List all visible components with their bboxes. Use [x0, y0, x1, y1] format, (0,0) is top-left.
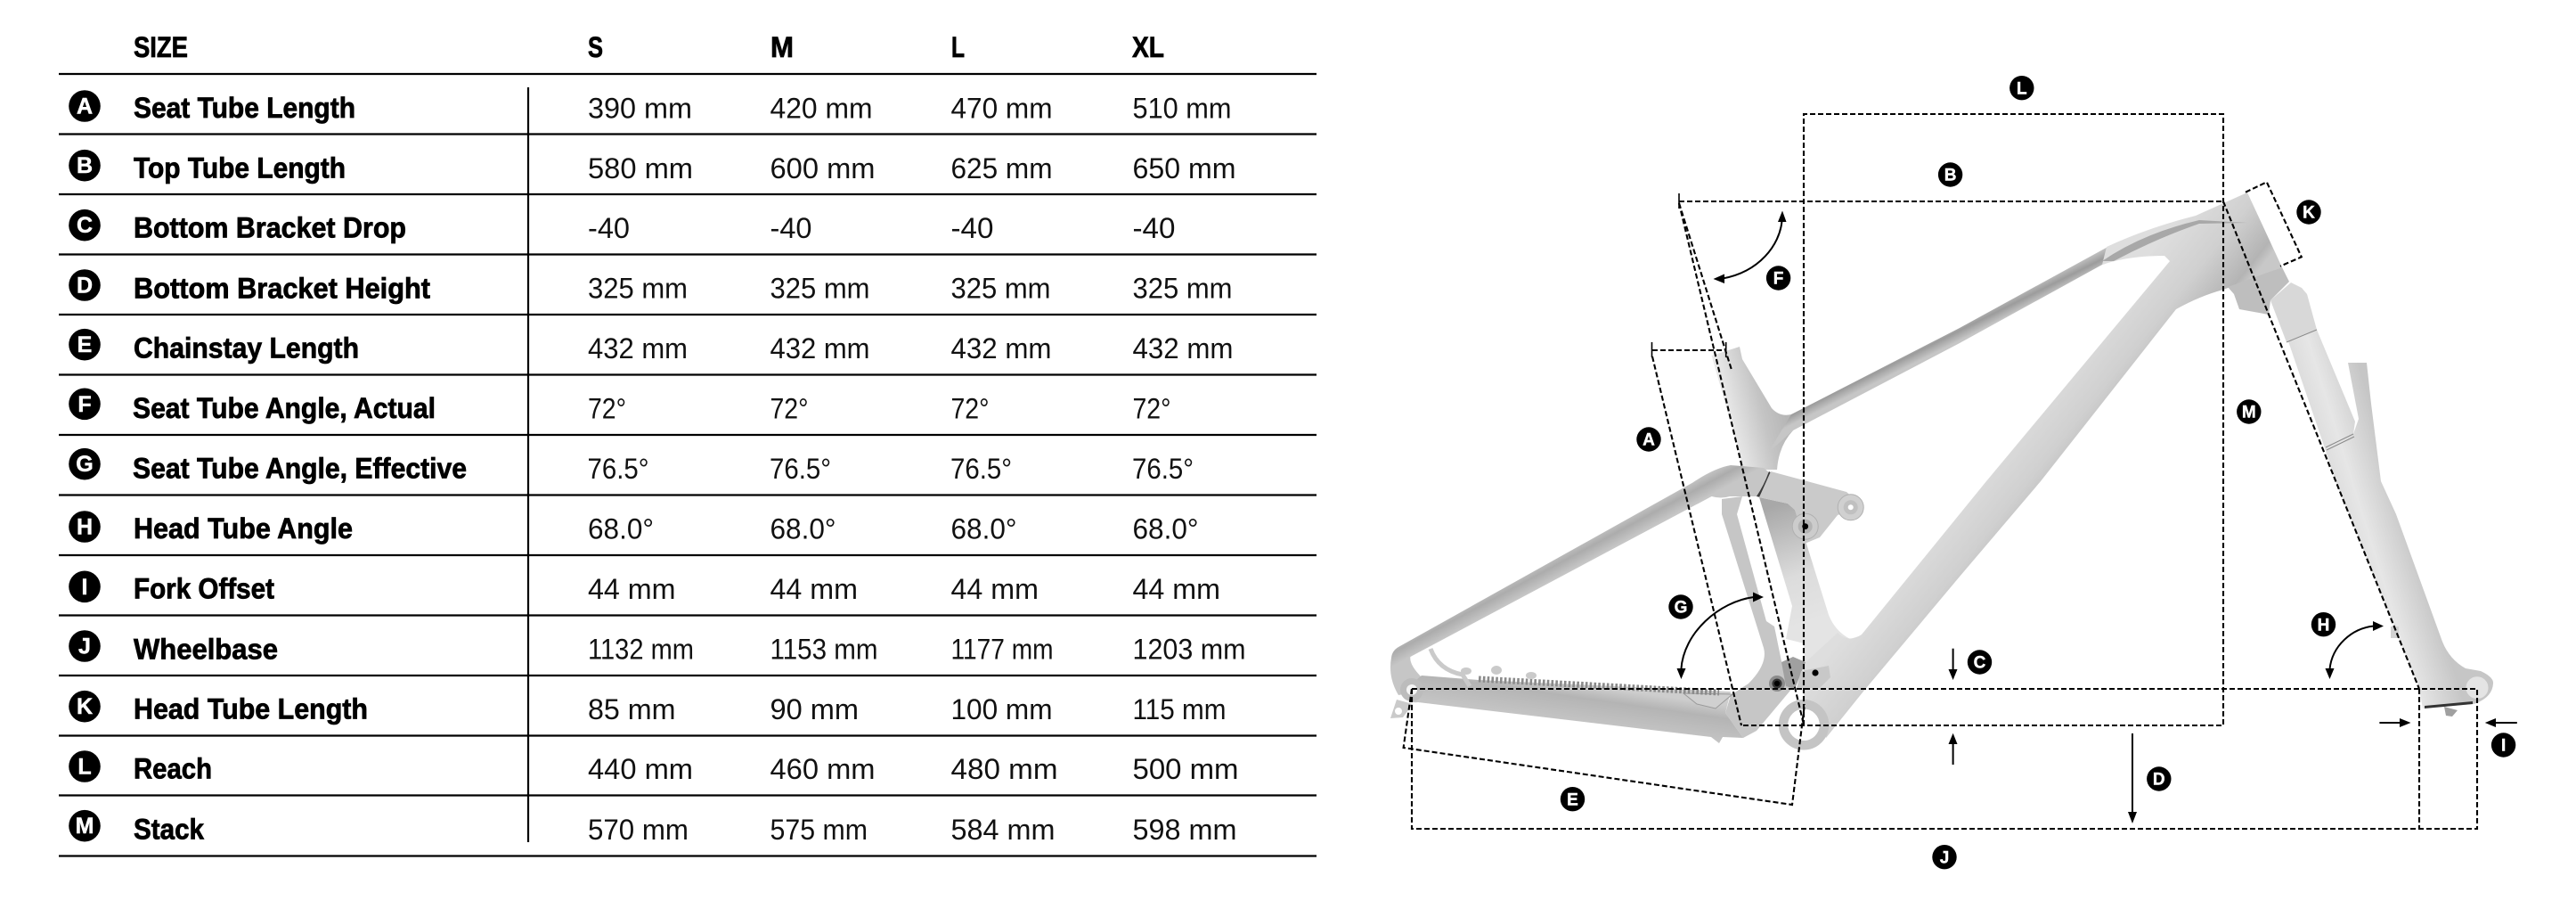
seat tube effective line — [1679, 203, 1804, 725]
chain guard teeth — [1479, 679, 1719, 692]
fork offset line — [2418, 689, 2420, 829]
row J: Wheelbase — [134, 633, 278, 665]
bike frame and fork illustration — [1390, 192, 2493, 745]
row I: I — [82, 575, 87, 600]
badge I: I — [2501, 737, 2506, 756]
badge L: L — [2017, 79, 2027, 98]
row G: Seat Tube Angle, Effective — [133, 452, 467, 484]
seat tube and shock — [1759, 497, 1871, 691]
badge I — [2491, 733, 2515, 758]
fork dropout — [2425, 676, 2489, 717]
top tube line B — [1679, 201, 2223, 202]
row E: Chainstay Length — [134, 332, 359, 364]
ticks — [1651, 193, 1726, 357]
badge H: H — [2318, 616, 2329, 635]
badge C — [1968, 650, 1992, 675]
row H: 68.0° — [588, 513, 654, 545]
seat stay end cap — [1757, 471, 1772, 497]
row B: Top Tube Length — [134, 152, 346, 184]
row M: Stack — [134, 814, 205, 846]
row C: Bottom Bracket Drop — [134, 212, 406, 244]
row J: 1177 mm — [951, 633, 1053, 665]
bottom bracket pivot — [1797, 666, 1830, 688]
row B: 580 mm — [588, 152, 693, 184]
row D: 325 mm — [588, 273, 688, 305]
row A: A — [77, 94, 93, 119]
badge B — [1938, 162, 1962, 187]
row E: 432 mm — [951, 332, 1051, 364]
badge M: M — [2242, 404, 2256, 422]
row I — [69, 570, 1220, 605]
badge L — [2009, 76, 2034, 100]
row M: 575 mm — [770, 814, 868, 846]
down tube and head tube — [1804, 192, 2282, 738]
badge H — [2311, 612, 2336, 636]
seat tube actual line — [1679, 203, 1732, 370]
row A: Seat Tube Length — [134, 92, 355, 124]
row K: 90 mm — [770, 693, 859, 725]
badge J: J — [1940, 848, 1949, 867]
header row: S — [588, 31, 603, 63]
head angle line — [2223, 201, 2419, 689]
row B: 625 mm — [951, 152, 1053, 184]
row J: 1132 mm — [588, 633, 694, 665]
badge G — [1668, 594, 1693, 619]
fork crown — [2270, 283, 2317, 342]
row C: -40 — [1133, 212, 1176, 244]
row H: Head Tube Angle — [134, 512, 353, 545]
swingarm pivot — [1769, 676, 1785, 692]
row A: 390 mm — [588, 93, 692, 125]
row C: C — [77, 213, 93, 238]
geometry table — [59, 31, 1317, 856]
row L: 460 mm — [770, 753, 875, 785]
badge K: K — [2303, 204, 2315, 223]
badge B: B — [1944, 167, 1956, 185]
row H: 68.0° — [1133, 513, 1199, 545]
chainstay — [1403, 676, 1743, 743]
row E — [69, 329, 1234, 364]
fork lower leg — [2325, 363, 2493, 708]
row K: Head Tube Length — [134, 693, 368, 725]
row K: 115 mm — [1133, 693, 1226, 725]
row K: 100 mm — [951, 693, 1053, 725]
row B: 600 mm — [770, 152, 875, 184]
arrows I — [2379, 718, 2517, 727]
arrow H — [2325, 621, 2384, 679]
top tube — [1768, 245, 2113, 453]
row M: 598 mm — [1133, 814, 1236, 846]
row A — [69, 90, 1232, 125]
row F: 72° — [588, 392, 626, 424]
row F: 72° — [770, 392, 809, 424]
row L — [69, 750, 1239, 785]
badge J — [1932, 845, 1957, 869]
seat stays — [1390, 465, 1769, 695]
dashed measurement lines — [1404, 114, 2477, 829]
row L: 480 mm — [951, 753, 1058, 785]
row I: 44 mm — [951, 573, 1039, 605]
row B: B — [77, 153, 93, 178]
rocker link — [1759, 471, 1863, 544]
seat tube length A — [1652, 350, 1741, 725]
strut and swingarm plate — [1722, 496, 1794, 738]
row I: Fork Offset — [134, 573, 274, 605]
row C: -40 — [951, 212, 994, 244]
fork brake tab — [2391, 626, 2399, 638]
lower link — [1781, 657, 1806, 689]
arrow G — [1676, 592, 1764, 679]
row F: 72° — [951, 392, 989, 424]
badge F: F — [1773, 270, 1783, 289]
badge A: A — [1643, 431, 1655, 450]
row A: 420 mm — [770, 93, 873, 125]
row A: 470 mm — [951, 93, 1053, 125]
row J — [69, 630, 1246, 665]
row G: 76.5° — [950, 453, 1012, 485]
row F — [69, 389, 1171, 424]
row K: K — [77, 694, 93, 719]
badge A — [1636, 427, 1661, 452]
guard bumps — [1461, 666, 1537, 679]
row B — [69, 150, 1236, 184]
row H — [69, 511, 1199, 545]
row E: E — [77, 332, 92, 357]
badge E — [1561, 787, 1585, 811]
row L: 440 mm — [588, 753, 693, 785]
bottom bracket shell — [1783, 704, 1824, 745]
head tube length K — [2246, 182, 2302, 266]
fork seams — [2287, 330, 2354, 450]
row M — [69, 810, 1237, 846]
row C: -40 — [770, 212, 812, 244]
arrow D — [2128, 733, 2137, 823]
badge M — [2237, 399, 2261, 424]
row J: 1203 mm — [1133, 633, 1245, 665]
row H: 68.0° — [770, 513, 836, 545]
row M: 584 mm — [951, 814, 1055, 846]
row D: Bottom Bracket Height — [134, 272, 430, 304]
row B: 650 mm — [1133, 152, 1236, 184]
badge C: C — [1974, 654, 1986, 673]
row F: Seat Tube Angle, Actual — [133, 392, 436, 424]
table rules — [59, 74, 1317, 856]
badge G: G — [1675, 599, 1687, 618]
row D: 325 mm — [951, 273, 1051, 305]
row L: 500 mm — [1133, 753, 1238, 785]
row H: 68.0° — [951, 513, 1017, 545]
arrows C — [1949, 649, 1958, 765]
row D — [69, 269, 1233, 305]
row L: L — [77, 754, 92, 779]
fork bracket — [2228, 267, 2289, 315]
reach and stack box L M — [1741, 114, 2223, 725]
row G: 76.5° — [588, 453, 648, 485]
row G: G — [76, 452, 94, 477]
row H: H — [77, 515, 93, 540]
wheelbase box J — [1412, 689, 2477, 829]
row I: 44 mm — [1133, 573, 1220, 605]
seat mast — [1712, 347, 1817, 470]
header row: L — [951, 31, 965, 63]
header row: XL — [1132, 31, 1164, 63]
row M: M — [76, 814, 94, 839]
row D: 325 mm — [1133, 273, 1233, 305]
badge F — [1766, 266, 1790, 291]
row M: 570 mm — [588, 814, 689, 846]
top tube to head transition — [2102, 220, 2247, 261]
badge D — [2147, 766, 2172, 791]
header row: SIZE — [134, 31, 188, 63]
rear dropout — [1390, 678, 1423, 718]
fork stanchion — [2288, 330, 2355, 448]
chainstay top plate — [1683, 693, 1732, 708]
row C — [69, 209, 1176, 244]
row J: J — [78, 635, 91, 659]
row I: 44 mm — [770, 573, 858, 605]
row F: 72° — [1133, 392, 1170, 424]
cable guide — [1431, 649, 1470, 686]
row K: 85 mm — [588, 693, 675, 725]
chainstay length E — [1404, 689, 1805, 805]
row G — [69, 448, 1194, 485]
row K — [69, 691, 1227, 725]
white gap under shock — [1783, 639, 1805, 662]
row I: 44 mm — [588, 573, 675, 605]
row D: D — [77, 273, 93, 298]
header row: M — [770, 31, 794, 63]
badge K — [2296, 200, 2321, 225]
row D: 325 mm — [770, 273, 869, 305]
row E: 432 mm — [588, 332, 688, 364]
arrow F — [1714, 210, 1787, 283]
badge D: D — [2153, 771, 2165, 790]
row F: F — [77, 392, 92, 417]
ground line — [1412, 688, 2477, 690]
row E: 432 mm — [770, 332, 869, 364]
row G: 76.5° — [1132, 453, 1194, 485]
header row — [134, 31, 1164, 63]
row A: 510 mm — [1133, 93, 1231, 125]
row L: Reach — [134, 753, 212, 785]
row G: 76.5° — [770, 453, 831, 485]
row C: -40 — [588, 212, 630, 244]
row E: 432 mm — [1133, 332, 1233, 364]
row J: 1153 mm — [770, 633, 878, 665]
badge E: E — [1567, 790, 1578, 809]
